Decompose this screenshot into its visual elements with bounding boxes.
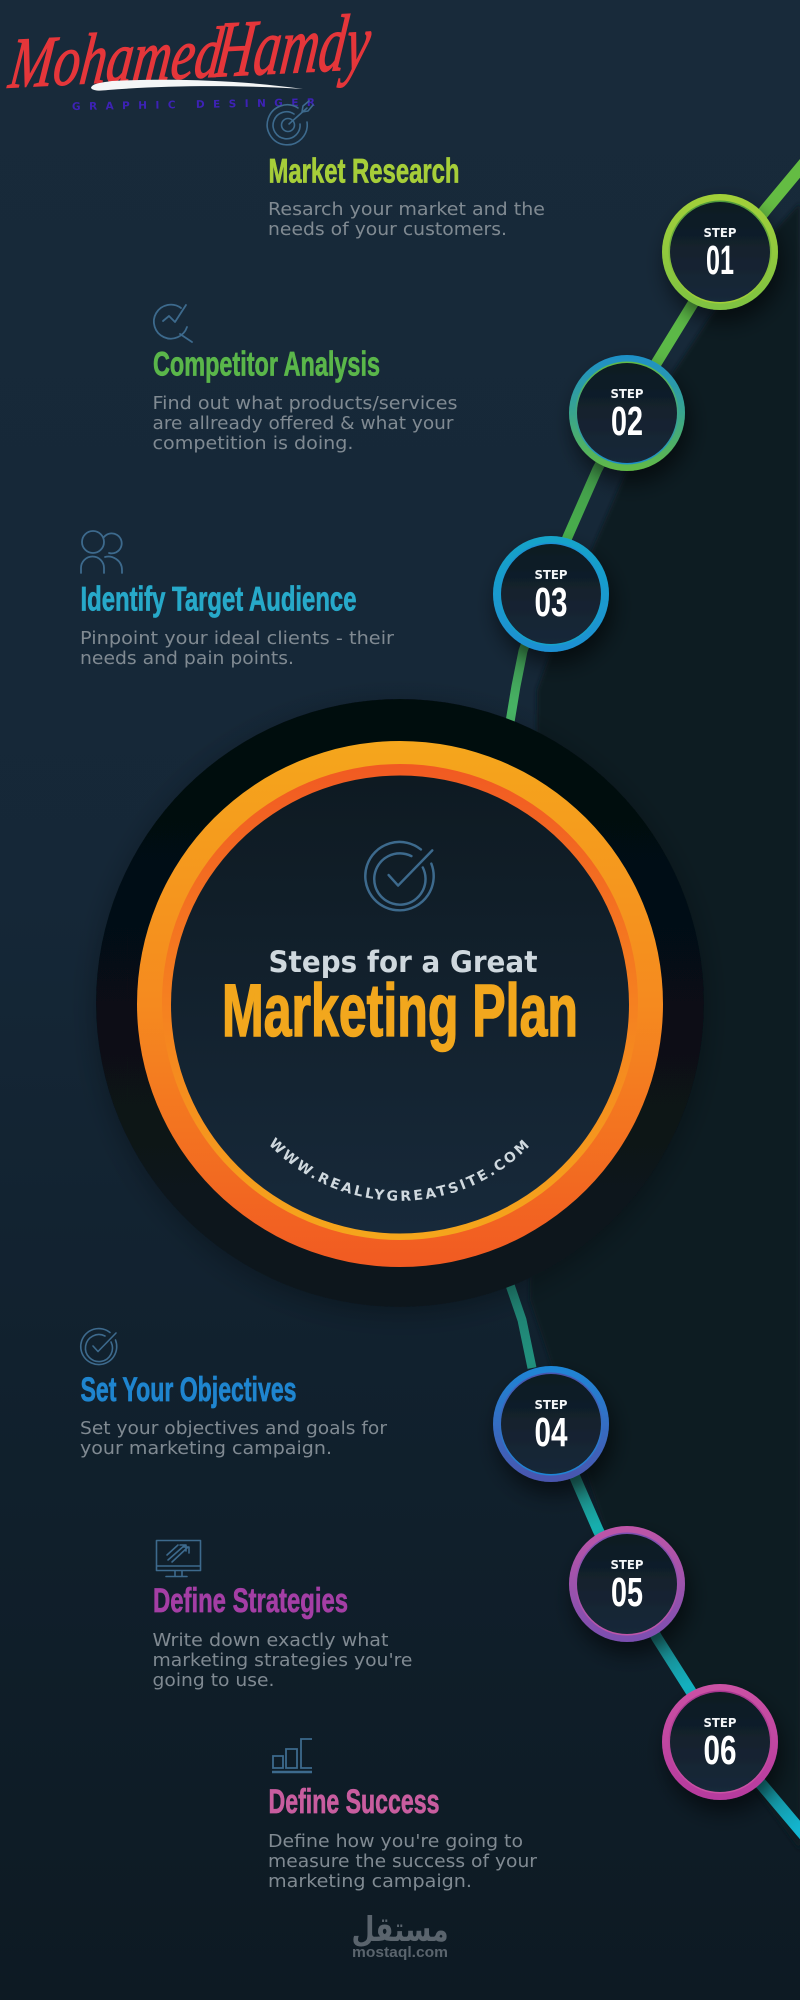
watermark: mostaql	[352, 1910, 448, 1961]
step 5 content: Define Strategies: Write down exactly what	[152, 1630, 388, 1651]
step 6 content: Define Success: Define Success	[268, 1783, 440, 1821]
step 1 content: Market Research: needs of your customers.	[268, 219, 507, 240]
step 6 content: Define Success: measure the success of your	[268, 1851, 538, 1872]
step 04 badge: 04	[534, 1409, 568, 1455]
step 05 badge: 05	[611, 1569, 643, 1615]
icon: bar chart	[272, 1739, 312, 1772]
logo: Mohamed Hamdy signature: GRAPHIC DESINGER	[72, 97, 315, 113]
step 01 badge	[662, 194, 778, 310]
step 3 content: Identify Target Audience: needs and pain points.	[80, 648, 294, 669]
timeline path	[510, 154, 800, 1844]
step 6 content: Define Success: marketing campaign.	[268, 1871, 472, 1892]
step 1 content: Market Research: Resarch your market and the	[268, 199, 545, 220]
step 2 content: Competitor Analysis: are allready offered & what your	[152, 413, 454, 434]
step 3 content: Identify Target Audience	[80, 531, 395, 669]
step 4 content: Set Your Objectives: Set Your Objectives	[80, 1371, 296, 1409]
step 03 badge: STEP	[534, 567, 568, 582]
logo: Mohamed Hamdy signature: Mohamed	[5, 11, 228, 104]
step 06 badge: STEP	[704, 1715, 736, 1730]
step 6 content: Define Success	[268, 1739, 538, 1892]
icon: target	[267, 101, 313, 145]
step 5 content: Define Strategies: Define Strategies	[153, 1582, 348, 1620]
step 4 content: Set Your Objectives: Set your objectives and goals for	[80, 1418, 388, 1439]
heading: Steps for a Great: Steps for a Great	[268, 945, 538, 979]
step 1 content: Market Research	[267, 101, 545, 240]
step 5 content: Define Strategies: marketing strategies you're	[152, 1650, 412, 1671]
icon: central check badge	[365, 842, 434, 910]
curved website text: WWW.REALLYGREATSITE.COM	[270, 1137, 529, 1201]
watermark: mostaql: مستقل	[352, 1910, 448, 1950]
step 02 badge	[569, 355, 685, 471]
logo: Mohamed Hamdy signature	[5, 0, 376, 113]
step 1 content: Market Research: Market Research	[268, 152, 460, 190]
step 02 badge: STEP	[610, 386, 644, 401]
step 02 badge: 02	[611, 398, 643, 444]
step 4 content: Set Your Objectives: your marketing campaign.	[80, 1438, 332, 1459]
step 06 badge	[662, 1684, 778, 1800]
step 6 content: Define Success: Define how you're going to	[268, 1831, 523, 1852]
diagonal shadow area behind the timeline	[530, 203, 800, 1850]
step 5 content: Define Strategies: going to use.	[152, 1670, 274, 1691]
step 04 badge	[493, 1366, 609, 1482]
step 03 badge: 03	[534, 579, 568, 625]
step 04 badge: STEP	[534, 1397, 568, 1412]
step 05 badge	[569, 1526, 685, 1642]
icon: check badge	[81, 1329, 117, 1365]
step 2 content: Competitor Analysis	[152, 305, 457, 454]
step 03 badge	[493, 536, 609, 652]
step 01 badge: 01	[706, 237, 734, 283]
step 2 content: Competitor Analysis: competition is doing.	[152, 433, 354, 454]
step 3 content: Identify Target Audience: Identify Target Audience	[80, 580, 356, 618]
heading: Marketing Plan: Marketing Plan	[222, 969, 578, 1052]
step 06 badge: 06	[704, 1727, 736, 1773]
watermark: mostaql: mostaql.com	[352, 1945, 448, 1961]
step 2 content: Competitor Analysis: Competitor Analysis	[153, 346, 380, 384]
step 3 content: Identify Target Audience: Pinpoint your ideal clients - their	[80, 628, 395, 649]
central circle panel	[96, 699, 704, 1309]
icon: magnifier with trend	[154, 305, 192, 342]
step 01 badge: STEP	[704, 225, 736, 240]
icon: monitor with arrows	[156, 1540, 200, 1576]
icon: two people	[81, 531, 122, 573]
step 4 content: Set Your Objectives	[80, 1329, 388, 1459]
step 5 content: Define Strategies	[152, 1540, 412, 1691]
step 2 content: Competitor Analysis: Find out what products/services	[152, 393, 457, 414]
step 05 badge: STEP	[610, 1557, 644, 1572]
